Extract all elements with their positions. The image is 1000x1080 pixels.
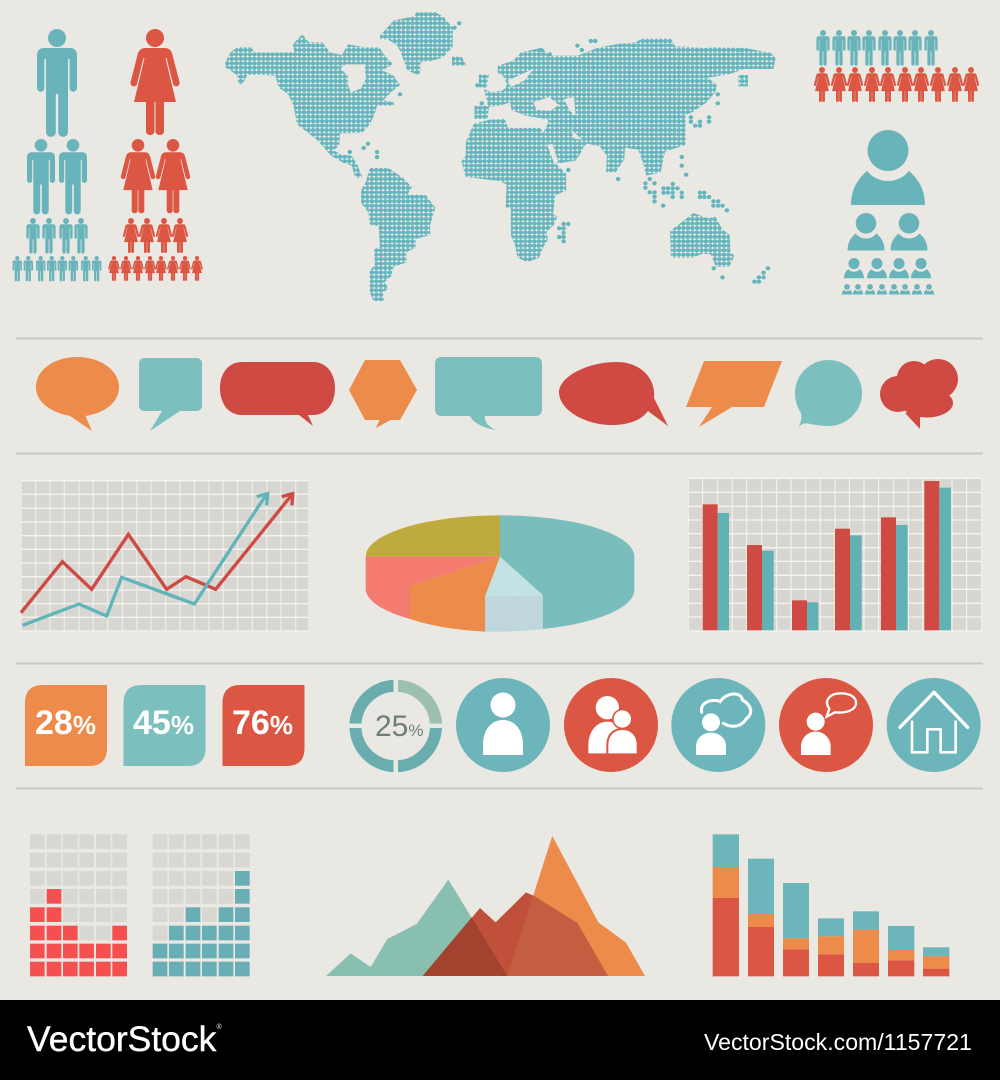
slice: teal — [500, 515, 634, 629]
footer bar — [0, 1000, 1000, 1080]
icon: user with thought cloud — [671, 678, 765, 772]
series: red line with arrow — [21, 494, 293, 613]
footer logo text: VectorStock — [27, 1019, 216, 1059]
slice: pale blue top — [485, 557, 543, 597]
bars: teal series — [718, 488, 951, 630]
slice: pale blue front — [485, 595, 543, 632]
pictogram: row of men and row of women — [814, 30, 979, 102]
percentage card: 76% — [222, 685, 304, 766]
percentage card: 45% — [124, 685, 206, 766]
bubble: teal rounded rectangle — [139, 358, 202, 431]
dotted world map — [223, 14, 780, 299]
donut gauge: 25% — [348, 678, 444, 774]
percentage card: 45%: 45% — [133, 704, 194, 742]
square grid chart: red — [30, 834, 127, 976]
bubble: red wide rounded — [220, 362, 335, 426]
bars: red series — [703, 481, 939, 630]
speech bubbles row — [36, 357, 958, 431]
line chart — [21, 481, 309, 631]
grouped bar chart — [688, 478, 982, 631]
donut gauge: 25%: 25% — [375, 710, 424, 743]
square grid chart: teal — [153, 834, 250, 976]
area mountain chart — [326, 836, 645, 976]
pictogram: male population pyramid — [13, 29, 101, 281]
percentage card: 76%: 76% — [232, 704, 293, 742]
water cut-outs — [341, 64, 582, 164]
bubble: orange hexagon — [349, 360, 417, 428]
pictogram: female population pyramid — [108, 29, 203, 281]
footer url text: VectorStock.com/1157721 — [704, 1029, 972, 1055]
slice: orange — [410, 557, 500, 632]
3D pie chart — [366, 515, 634, 632]
bubble: red blob — [559, 362, 668, 426]
stacked bar chart — [713, 834, 949, 976]
icon: user with speech bubble — [779, 678, 873, 772]
bubble: red cloud — [880, 359, 958, 429]
bubble: teal large rectangle — [435, 357, 542, 430]
bubble: teal circle — [795, 360, 862, 428]
slice: salmon — [366, 557, 500, 619]
slice: olive — [366, 515, 500, 557]
bubble: orange parallelogram — [686, 361, 782, 427]
series: teal line with arrow — [23, 494, 268, 625]
percentage card: 28%: 28% — [35, 704, 96, 742]
icon: single user circle — [456, 678, 550, 772]
percentage card: 28% — [25, 685, 107, 766]
icon: two users circle — [564, 678, 658, 772]
footer logo text: ® — [216, 1023, 222, 1031]
bubble: orange oval — [36, 357, 119, 431]
icon: house — [887, 678, 981, 772]
pictogram: user hierarchy — [842, 130, 934, 294]
